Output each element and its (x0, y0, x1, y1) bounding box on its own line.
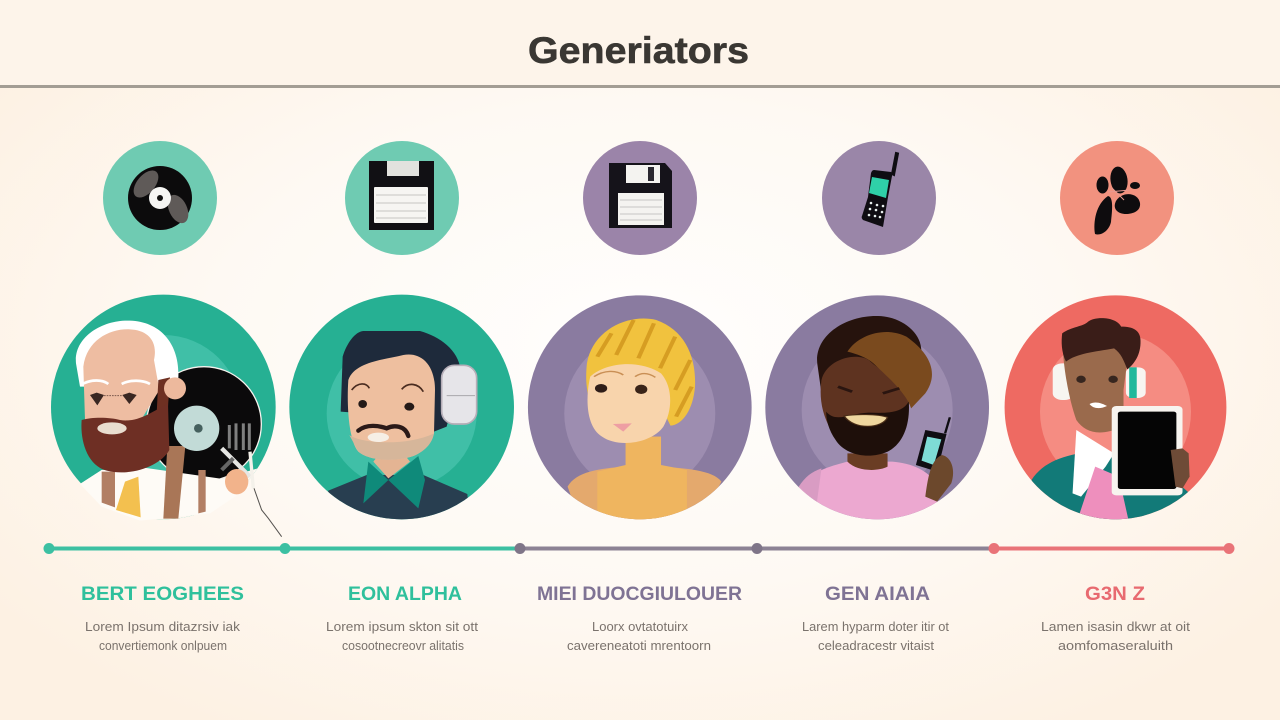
generation label 1 (81, 584, 244, 653)
generation label 3: MIEI DUOCGIULOUER (537, 584, 742, 605)
generation label 3 (537, 584, 742, 653)
generation label 5: G3N Z (1085, 584, 1145, 605)
generation label 4: Larem hyparm doter itir ot (802, 619, 949, 634)
generation label 2 (326, 584, 478, 653)
generation label 2: EON ALPHA (348, 584, 462, 605)
generation label 5 (1041, 584, 1190, 653)
portrait: man with headphones and tablet (1001, 293, 1232, 523)
portrait: bearded man with cell phone (760, 293, 996, 523)
icon: floppy disk teal (345, 141, 459, 255)
icon row (103, 141, 1174, 255)
generation label 1: Lorem Ipsum ditazrsiv iak (85, 619, 241, 634)
portrait: man with headphones (287, 293, 517, 523)
portrait row 1: first two portraits (50, 293, 517, 537)
header band (0, 0, 1280, 88)
title: Generiators (528, 30, 749, 71)
timeline (44, 543, 1234, 554)
icon: abstract blob device (1060, 141, 1174, 255)
generation label 2: cosootnecreovr alitatis (342, 638, 464, 653)
generation label 1: convertiemonk onlpuem (99, 638, 227, 653)
icon: floppy disk purple (583, 141, 697, 255)
icon: mobile phone (822, 141, 936, 255)
generation label 3: cavereneatoti mrentoorn (567, 638, 711, 653)
generation label 4: GEN AIAIA (825, 584, 930, 605)
portrait: bearded elder with vinyl (50, 293, 282, 537)
node: start (44, 543, 54, 554)
generation label 5: aomfomaseraluith (1058, 638, 1173, 653)
node: second (280, 543, 290, 554)
generation label 4 (802, 584, 949, 653)
generation label 2: Lorem ipsum skton sit ott (326, 619, 478, 634)
portrait row 2: last three portraits (524, 293, 1232, 523)
node: third (514, 543, 526, 554)
generation label 1: BERT EOGHEES (81, 584, 244, 605)
node: end (1224, 543, 1234, 554)
generation label 5: Lamen isasin dkwr at oit (1041, 619, 1190, 634)
generation label 4: celeadracestr vitaist (818, 638, 934, 653)
icon: vinyl record (103, 141, 217, 255)
portrait: blonde woman (524, 293, 755, 523)
generation label 3: Loorx ovtatotuirx (592, 619, 688, 634)
node: fifth (988, 543, 1000, 554)
node: fourth (752, 543, 762, 554)
